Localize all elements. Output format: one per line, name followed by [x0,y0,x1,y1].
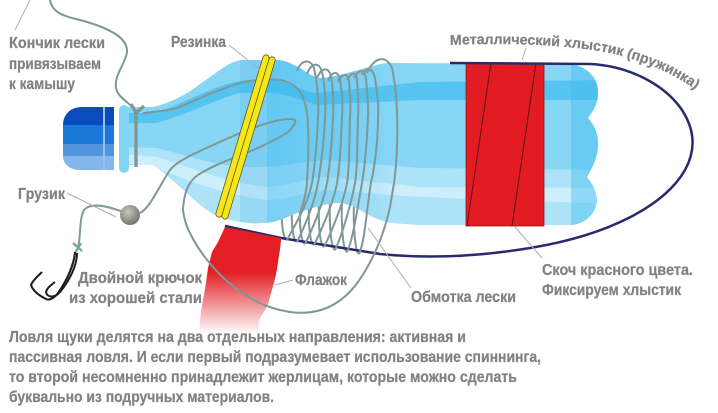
label: line winding: Обмотка лески [411,289,516,306]
description paragraph: то второй несомненно принадлежит жерлицам, которые можно сделать [9,369,517,386]
description paragraph [9,329,541,406]
label: flag: Флажок [295,272,348,289]
label: red tape: Скоч красного цвета. [542,262,693,279]
weight line and hook leader [78,206,123,248]
label: reed line: к камышу [9,76,75,93]
description paragraph: Ловля щуки делятся на два отдельных направления: активная и [9,329,466,346]
label: reed line: привязываем [9,56,101,73]
label: double hook: Двойной крючок [78,270,203,287]
main line from reed [50,0,133,108]
label: metal whip: Металлический хлыстик (пружинка) [450,34,700,90]
leader knot [73,243,82,253]
label: rubber band: Резинка [171,34,226,51]
tape: red scotch [466,63,544,226]
label: rubber band [171,34,260,70]
label: flag [275,272,348,289]
label: weight: Грузик [18,186,66,203]
label: line winding [368,228,516,306]
spring whip [225,63,693,256]
label: double hook: из хорошей стали [69,290,202,307]
coil back loops [282,200,359,254]
bottle body [128,60,598,225]
label: double hook [69,270,203,307]
label: red tape [515,227,693,299]
bottle [63,60,598,225]
fishing line wrap [287,62,378,254]
label: weight [18,186,116,217]
weight [120,205,140,225]
label: red tape: Фиксируем хлыстик [542,282,682,299]
neck ring [119,105,129,173]
description paragraph: пассивная ловля. И если первый подразумевает использование спиннинга, [9,349,541,366]
line to weight, loop and big arc [140,59,397,313]
flag [200,227,281,334]
label: reed line: Кончик лески [9,35,105,52]
double hook [31,252,77,300]
elastic band [219,58,272,216]
bottle cap [63,107,114,170]
label: reed line [9,0,105,93]
knot on neck [131,104,144,167]
line to coil [143,79,308,213]
description paragraph: буквально из подручных материалов. [9,389,274,406]
